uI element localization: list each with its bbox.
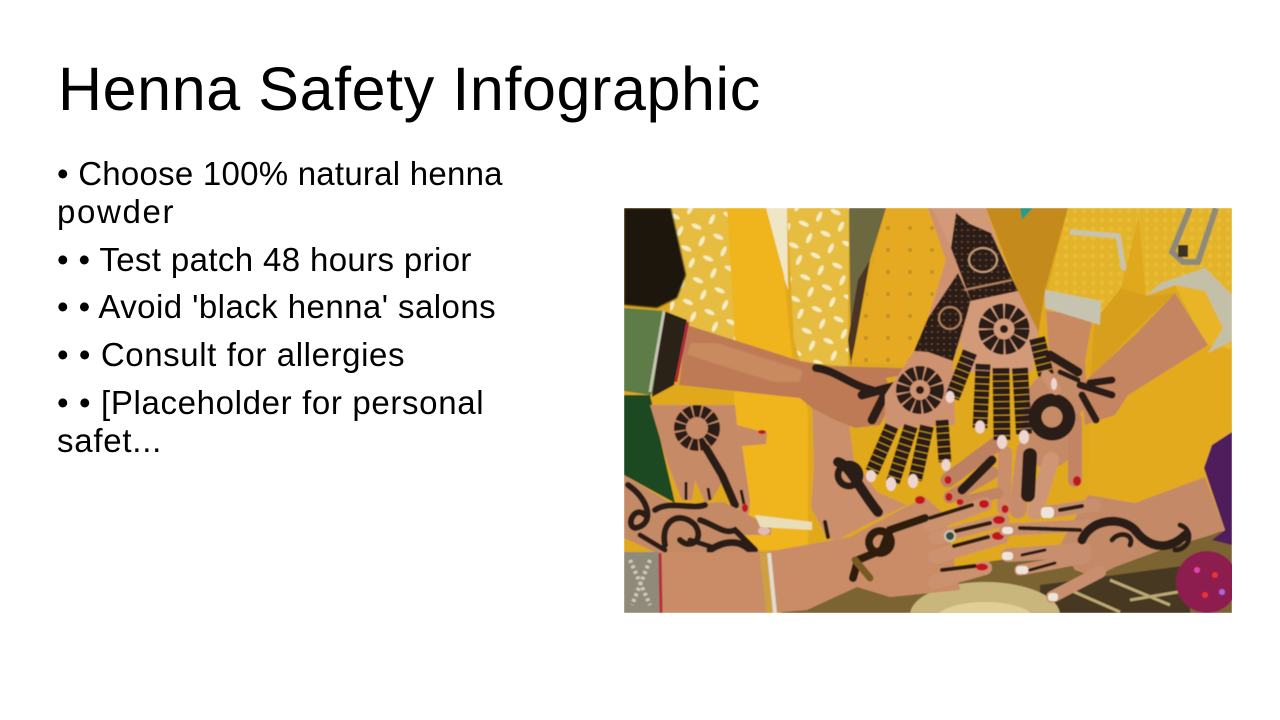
bullet: placeholder: safet... [57, 422, 162, 459]
main hand pointing down [932, 208, 1057, 449]
bullet: black henna: • • Avoid 'black henna' salons [57, 288, 496, 325]
right hand with paisley henna [1002, 477, 1225, 601]
bullet: natural henna powder: • Choose 100% natural henna [57, 155, 503, 192]
medallion henna [680, 411, 744, 505]
bullet: test patch: • • Test patch 48 hours prior [57, 241, 472, 278]
upper left arm with green sleeve [624, 308, 902, 428]
lower-left hand [650, 405, 767, 514]
text block: safety checklist [57, 155, 503, 459]
second hand pointing down [866, 208, 980, 491]
bottom arm with bracelets [624, 476, 1081, 613]
bullet: natural henna powder [57, 155, 503, 230]
bullet: allergies: • • Consult for allergies [57, 336, 405, 373]
right palm with fingers [948, 400, 1075, 512]
right arm and middle-right arm [948, 293, 1208, 512]
dark green backdrop [624, 395, 675, 503]
central white stripe on scarf [755, 515, 812, 530]
silver cuffs and necklace [1045, 208, 1232, 353]
purple sleeve [1204, 432, 1232, 545]
henna on right arm [962, 355, 1112, 495]
nails of main hand [946, 378, 1057, 449]
photo: hands decorated with henna [624, 208, 1232, 613]
red nails [915, 476, 1081, 570]
lower-left hand nails [742, 430, 770, 535]
bag and tray [780, 530, 1232, 613]
hair [624, 208, 686, 308]
white nails [1002, 507, 1058, 601]
title: Henna Safety Infographic [58, 55, 761, 123]
central hand [811, 395, 907, 540]
clothing backdrop [624, 208, 1238, 648]
bullet: placeholder [57, 384, 484, 459]
bullet: placeholder: • • [Placeholder for personal [57, 384, 484, 421]
nails of second hand [866, 459, 950, 491]
left forearm with henna [624, 475, 771, 553]
bullet: natural henna powder: powder [57, 193, 175, 230]
